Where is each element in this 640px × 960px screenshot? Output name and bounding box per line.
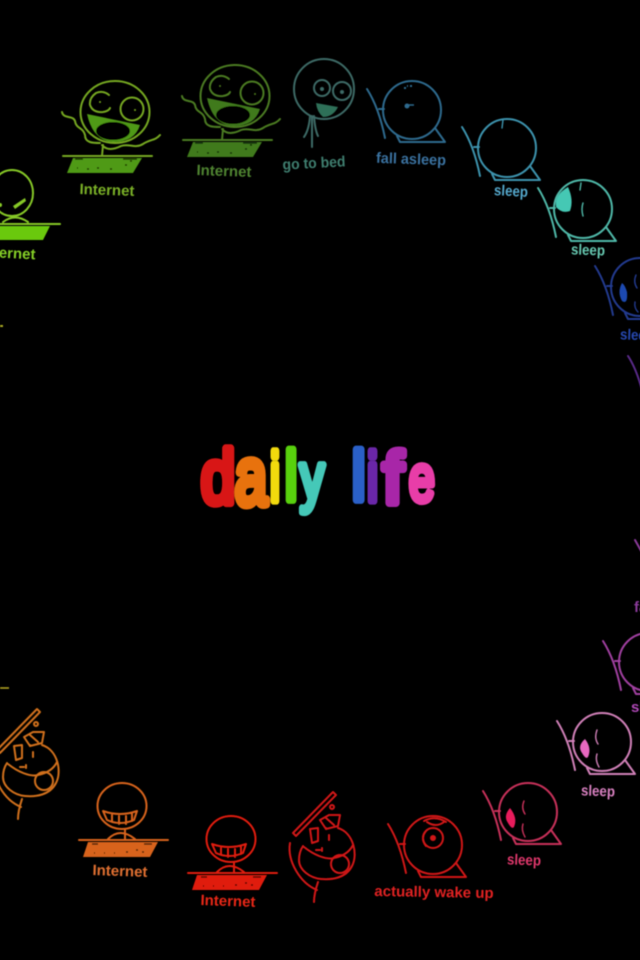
title: daily life: i (270, 441, 280, 516)
figure: Internet, orange: Internet (92, 862, 148, 881)
figure: Internet, green: Internet (79, 181, 135, 200)
figure: sleep, dark blue, cropped at right (595, 258, 640, 345)
figure: actually wake up (374, 816, 494, 902)
figure: go to bed: go to bed (282, 153, 346, 174)
title: daily life: e (409, 442, 435, 515)
title: daily life: a (235, 432, 267, 521)
figure: actually wake up: actually wake up (374, 883, 494, 902)
figure: Internet, lime, cropped at left (0, 170, 60, 263)
figure: Internet, dark green (182, 65, 280, 181)
figure: Internet, dark green: Internet (196, 162, 252, 181)
figure: go to bed (282, 59, 354, 174)
figure: sleep, light blue: sleep (494, 182, 528, 201)
edge mark: yellow desk fragment (0, 687, 9, 689)
figure: fall asleep, violet, cropped at right (634, 540, 640, 616)
title: daily life: d (201, 435, 235, 519)
title: daily life: i (367, 439, 378, 516)
figure: Internet, red (188, 816, 277, 911)
figure: flipping keyboard, red (290, 792, 355, 902)
figure: fall asleep (367, 81, 446, 169)
title: daily life (201, 432, 435, 521)
title: daily life: f (383, 439, 404, 519)
edge mark: yellow-green fragment (0, 325, 3, 327)
figure: sleep, light blue (462, 119, 540, 201)
title: daily life: y (300, 441, 324, 514)
figure: sleep, purple, cropped at right (603, 633, 640, 716)
figure: fall asleep: fall asleep (376, 150, 446, 169)
figure: Internet, orange (79, 783, 168, 881)
figure: chair edge, purple, cropped at right (628, 356, 640, 390)
figure: sleep, teal with ear blob (538, 180, 616, 260)
figure: sleep, teal with ear blob: sleep (571, 241, 605, 260)
figure: flipping keyboard, orange (0, 709, 59, 819)
figure: sleep, rose (483, 783, 561, 870)
figure: sleep, pink: sleep (581, 782, 615, 801)
title: daily life: l (352, 437, 365, 515)
figure: sleep, rose: sleep (507, 851, 541, 870)
title: daily life: l (285, 438, 297, 516)
figure: Internet, green (62, 81, 160, 200)
figure: sleep, pink (557, 713, 635, 801)
figure: Internet, red: Internet (200, 892, 256, 911)
